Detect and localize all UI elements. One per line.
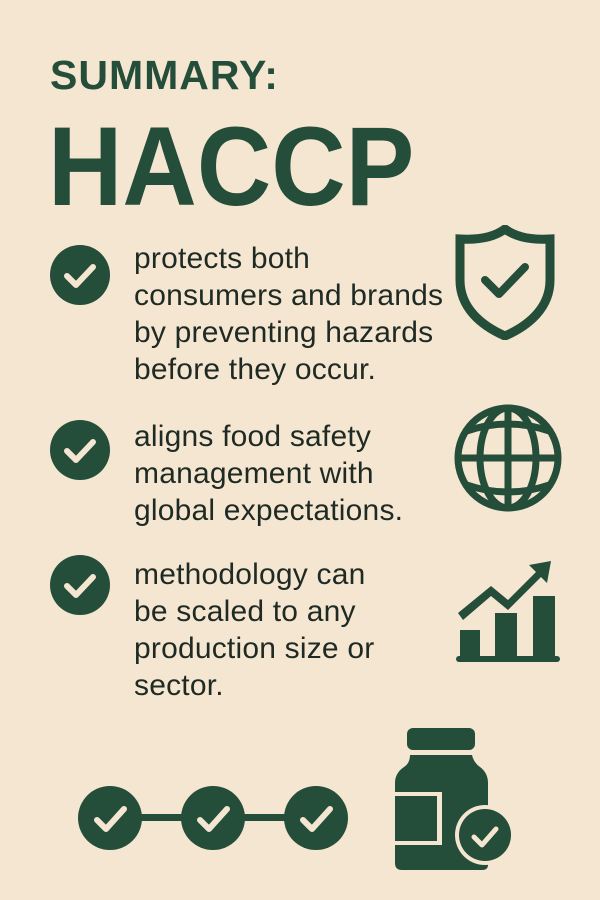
text 2: global expectations. <box>134 494 403 527</box>
text 1: by preventing hazards <box>134 316 433 349</box>
text 2: management with <box>134 457 374 490</box>
text 3 <box>134 558 374 702</box>
check icon 2 <box>50 420 110 480</box>
text 3: methodology can <box>134 558 366 591</box>
title: summary: SUMMARY: <box>50 52 279 98</box>
check icon 1 <box>50 245 110 305</box>
text 2: aligns food safety <box>134 420 371 453</box>
icon: shield <box>456 225 554 340</box>
text 3: production size or <box>134 632 374 665</box>
title: HACCP: HACCP <box>48 104 414 229</box>
check icon 3 <box>50 555 110 615</box>
text 3: sector. <box>134 669 224 702</box>
text 1: before they occur. <box>134 353 376 386</box>
bottom: bottle with badge <box>395 728 511 870</box>
icon: growth chart <box>456 561 560 662</box>
icon: globe <box>454 404 562 512</box>
text 1: protects both <box>134 242 310 275</box>
text 3: be scaled to any <box>134 595 356 628</box>
text 1 <box>134 242 443 386</box>
bottom: process chain <box>78 786 348 850</box>
text 2 <box>134 420 403 527</box>
text 1: consumers and brands <box>134 279 443 312</box>
